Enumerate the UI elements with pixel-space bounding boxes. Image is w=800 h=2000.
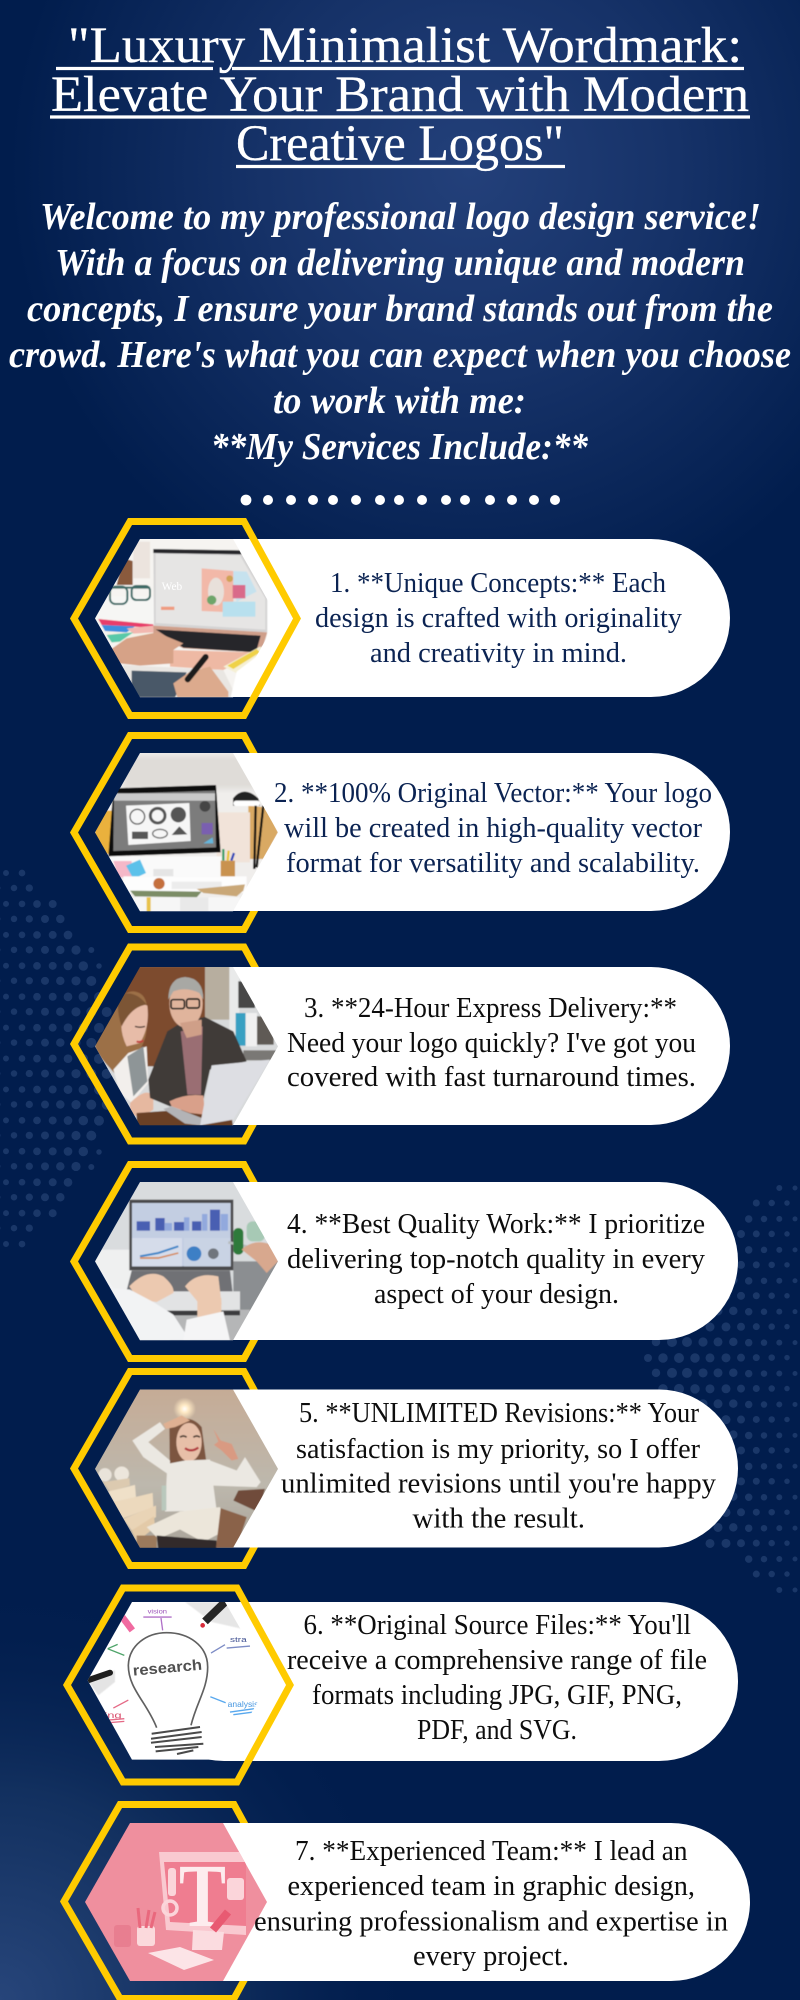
title: Creative Logos" xyxy=(236,116,564,172)
icon: laptop analytics photo xyxy=(90,1178,285,1343)
yellow hexagon frame xyxy=(74,1164,297,1358)
icon: research light bulb xyxy=(88,1602,258,1760)
text: express delivery: covered with fast turnaround times. xyxy=(287,1062,696,1093)
title xyxy=(50,18,750,172)
text: source files: receive a comprehensive range of file xyxy=(287,1645,707,1676)
white pill xyxy=(142,1823,750,1981)
white pill xyxy=(152,1182,738,1340)
icon: research light bulb: stra xyxy=(230,1635,248,1644)
white pill xyxy=(152,967,730,1125)
icon: research light bulb: ing xyxy=(104,1710,122,1720)
title: "Luxury Minimalist Wordmark: xyxy=(68,18,742,74)
panel: unique concepts xyxy=(74,522,730,716)
text: unique concepts: and creativity in mind. xyxy=(370,638,627,669)
text: experienced team: every project. xyxy=(413,1941,569,1972)
white pill xyxy=(152,539,730,697)
panel: experienced team xyxy=(64,1804,750,1998)
dotted divider xyxy=(241,495,560,505)
text: express delivery xyxy=(287,993,696,1093)
text: best quality: delivering top-notch quality in every xyxy=(287,1244,705,1275)
icon: research light bulb: vision xyxy=(148,1608,167,1615)
text: unlimited revisions: satisfaction is my priority, so I offer xyxy=(296,1434,701,1465)
yellow hexagon frame xyxy=(67,1588,290,1782)
icon: woman with idea photo xyxy=(90,1386,285,1550)
text: original vector: 2. **100% Original Vector:** Your logo xyxy=(274,778,712,809)
text: unique concepts: design is crafted with originality xyxy=(315,603,682,634)
services subheading: **My Services Include:** xyxy=(211,426,589,468)
panel: unlimited revisions xyxy=(74,1372,738,1566)
text: experienced team xyxy=(254,1836,728,1972)
text: best quality: 4. **Best Quality Work:** I prioritize xyxy=(287,1209,705,1240)
text: source files xyxy=(287,1610,707,1746)
text: source files: 6. **Original Source Files:** You'll xyxy=(304,1610,691,1641)
text: unlimited revisions: 5. **UNLIMITED Revisions:** Your xyxy=(299,1398,700,1429)
text: unique concepts xyxy=(315,568,682,669)
panel: express delivery xyxy=(74,947,730,1141)
yellow hexagon frame xyxy=(74,947,297,1141)
yellow hexagon frame xyxy=(64,1804,287,1998)
icon: research light bulb: research xyxy=(132,1657,203,1680)
icon: laptop design photo xyxy=(95,539,268,698)
text: best quality: aspect of your design. xyxy=(374,1279,619,1310)
panel: source files xyxy=(67,1588,738,1782)
text: experienced team: ensuring professionalism and expertise in xyxy=(254,1906,728,1938)
text: express delivery: 3. **24-Hour Express Delivery:** xyxy=(304,993,677,1024)
yellow hexagon frame xyxy=(74,1372,297,1566)
white pill xyxy=(152,1390,738,1548)
text: unlimited revisions xyxy=(281,1398,716,1534)
text: unique concepts: 1. **Unique Concepts:** Each xyxy=(330,568,666,599)
icon: business meeting photo xyxy=(90,963,285,1128)
text: original vector: format for versatility and scalability. xyxy=(286,848,700,879)
icon: desktop logo mockup photo xyxy=(90,749,285,914)
title: Elevate Your Brand with Modern xyxy=(51,67,749,123)
yellow hexagon frame xyxy=(74,522,297,716)
intro paragraph: concepts, I ensure your brand stands out from the xyxy=(27,288,773,330)
yellow hexagon frame xyxy=(74,736,297,930)
text: unlimited revisions: with the result. xyxy=(412,1504,585,1534)
intro paragraph: Welcome to my professional logo design service! xyxy=(40,196,761,238)
icon: research light bulb: analysis xyxy=(228,1699,259,1709)
intro paragraph: With a focus on delivering unique and modern xyxy=(55,242,745,284)
white pill xyxy=(145,1602,738,1761)
text: source files: PDF, and SVG. xyxy=(417,1715,577,1746)
text: original vector xyxy=(274,778,712,879)
white pill xyxy=(152,753,730,911)
panel: best quality xyxy=(74,1164,738,1358)
text: experienced team: 7. **Experienced Team:** I lead an xyxy=(295,1836,688,1867)
icon: pink typography monitor: T xyxy=(179,1847,226,1946)
panel: original vector xyxy=(74,736,730,930)
intro paragraph: to work with me: xyxy=(273,380,526,422)
icon: pink typography monitor xyxy=(85,1823,275,1981)
text: unlimited revisions: unlimited revisions until you're happy xyxy=(281,1468,716,1500)
text: experienced team: experienced team in graphic design, xyxy=(288,1871,695,1902)
icon text: web design: Web xyxy=(162,581,182,593)
text: best quality xyxy=(287,1209,705,1310)
intro paragraph xyxy=(9,196,791,468)
text: express delivery: Need your logo quickly? I've got you xyxy=(287,1028,696,1059)
text: original vector: will be created in high-quality vector xyxy=(284,813,703,844)
text: source files: formats including JPG, GIF, PNG, xyxy=(312,1680,682,1711)
